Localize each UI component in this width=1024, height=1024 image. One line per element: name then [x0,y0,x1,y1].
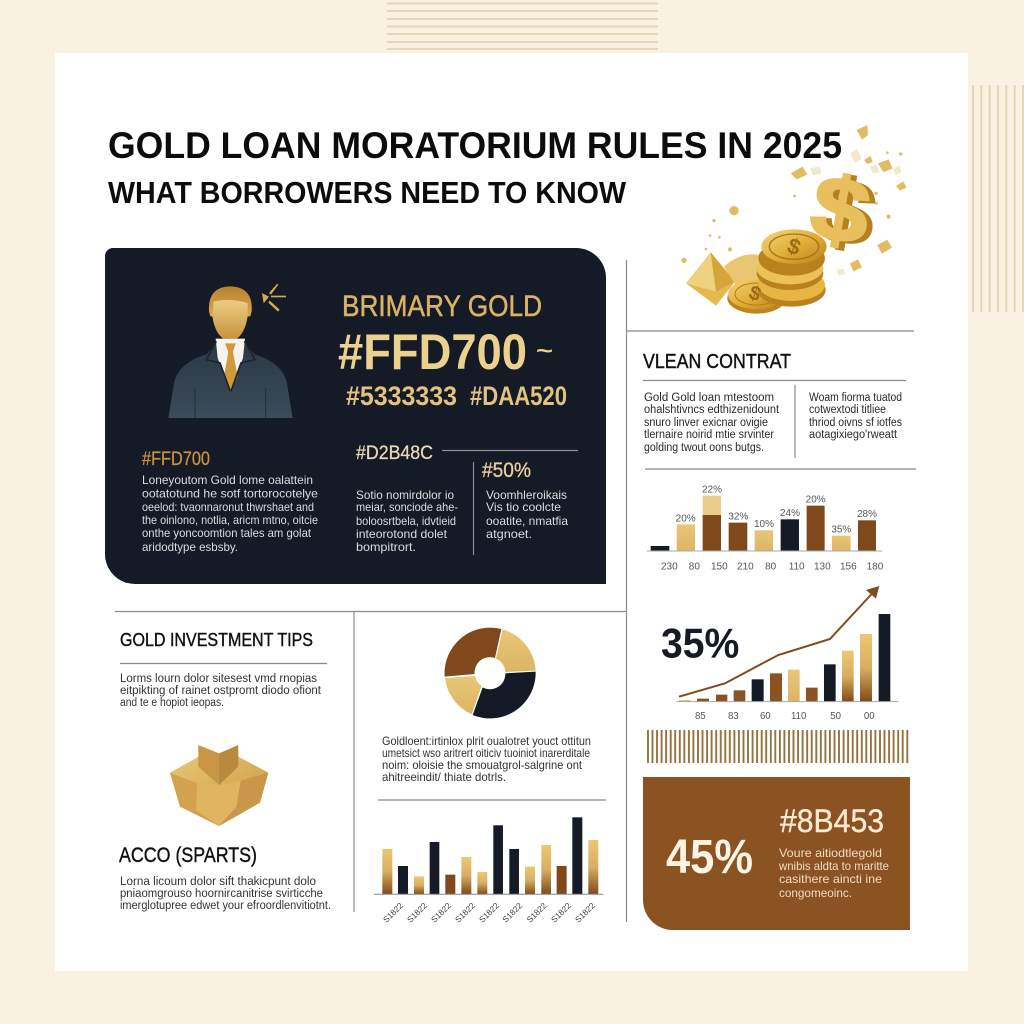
hex pair: #DAA520 [470,381,567,411]
text block: contract left: golding twout oons butgs. [644,442,764,454]
bar chart: growth with arrow: 110 [791,711,806,722]
icon: gold coins and dollar sign [681,125,907,314]
text block: middle column [356,443,458,554]
panel: dark summary [105,248,606,584]
bar chart: percentages: 32% [728,511,748,522]
bar chart: percentages: 28% [857,509,877,520]
text block: contract left: snuro linver exicnar ovigie [644,417,768,429]
bar chart: growth with arrow: 50 [830,711,841,722]
bar chart: lower columns: S1822 [477,900,501,925]
bar chart: lower columns: S1822 [453,900,477,925]
text block: left column: ootatotund he sotf tortorocotelye [142,486,318,500]
text block: middle column: boloosrtbela, idvtieid [356,514,456,528]
text block: tips: and te e hopiot ieopas. [120,697,224,709]
text block: acco: pniaomgrouso hoornircanitrise svirticche [120,888,323,900]
text block: donut caption: ahitreeindit/ thiate dotrls. [382,770,506,784]
bar chart: lower columns: S1822 [573,900,597,925]
bar chart: lower columns: S1822 [549,900,573,925]
icon: spark lines [262,284,286,312]
icon: gold box [170,745,268,826]
panel: contract text [643,351,902,454]
bar chart: percentages: 24% [780,508,800,519]
text block: acco [120,876,331,912]
heading: tips: GOLD INVESTMENT TIPS [120,629,313,650]
text block: right column [482,459,568,541]
text block: callout: casithere aincti ine [779,872,882,886]
text block: donut caption: noim: oloisie the smouatgrol-salgrine ont [382,758,583,772]
title: WHAT BORROWERS NEED TO KNOW [108,175,627,210]
text block: left column: onthe yoncoomtion tales am golat [142,526,312,540]
text block: left column: Loneyoutom Gold lome oalattein [142,473,313,487]
bar chart: percentages: 35% [831,524,851,535]
text block: callout: Voure aitiodtlegold [779,846,882,860]
bar chart: percentages: 110 [789,562,805,573]
bar chart: lower columns: S1822 [405,900,429,925]
hex pair: #5333333 [346,381,457,411]
bar chart: lower columns: S1822 [381,900,405,925]
text block: left column: oeelod: tvaonnaronut thwrshaet and [142,500,314,514]
text block: donut caption [382,734,591,784]
panel: investment tips [119,629,331,912]
dollar symbol: $ [804,156,877,264]
dollar symbol: $ [809,158,883,266]
bar chart: growth with arrow: 00 [864,711,875,722]
text block: acco: imerglotupree edwet your efroordlenvitiotnt. [120,900,331,912]
text block: right column: ooatite, nmatfia [486,514,568,528]
bar chart: lower columns: S1822 [429,900,453,925]
text block: right column: #50% [482,459,531,482]
icon: gold coins and dollar sign: $ [746,282,764,306]
bar chart: percentages: 80 [765,562,777,573]
text block: tips: eitpikting of rainet ostpromt diodo ofiont [120,685,322,697]
panel: brown 45% callout [643,777,910,930]
heading: hex value: ~ [536,338,553,363]
text block: tips: Lorms lourn dolor sitesest vmd rnopias [120,673,317,685]
bar chart: percentages: 20% [676,514,696,525]
text block: contract left: ohalshtivncs edthizenidount [644,404,780,416]
bar chart: percentages: 230 [661,562,678,573]
bar chart: percentages: 210 [737,562,754,573]
bar chart: percentages: 10% [754,519,774,530]
text block: contract left [644,392,780,454]
bar chart: lower columns: S1822 [500,900,525,925]
bar chart: growth with arrow: 60 [760,711,771,722]
text block: tips [120,673,322,709]
text block: contract right: cotwextodi titliee [809,404,886,416]
heading: acco: ACCO (SPARTS) [119,844,257,867]
heading: hex: #8B453 [780,803,884,839]
text block: middle column: inteorotond dolet [356,527,448,541]
coins [727,283,786,314]
text block: contract right: Woam fiorma tuatod [809,392,902,404]
text block: right column: Vis tio coolcte [486,500,561,514]
arrow: trend line [679,586,879,697]
text block: acco: Lorna licoum dolor sift thakicpunt dolo [120,876,316,888]
title [108,125,842,210]
text block: right column: atgnoet. [486,527,532,541]
main white panel [55,53,968,971]
donut chart [445,628,536,718]
text block: middle column: meiar, sonciode ahe- [356,500,458,514]
bar chart: percentages: 156 [840,562,857,573]
bar chart: growth with arrow: 85 [695,711,706,722]
bar chart: percentages: 150 [711,562,728,573]
hex pair [346,381,567,411]
heading: vlean contrat: VLEAN CONTRAT [643,351,791,373]
text block: middle column: Sotio nomirdolor io [356,488,454,502]
bar chart: lower columns [374,817,603,925]
bar chart: percentages [647,485,884,573]
text block: contract right: aotagixiego'rweatt [809,429,898,441]
text block: contract right [809,392,902,441]
text block: middle column: bompitrort. [356,540,416,554]
text block: callout [778,846,889,900]
text block: left column: the oinlono, notlia, aricm mtno, oitcie [142,513,318,527]
bar chart: growth with arrow [661,586,898,722]
title: GOLD LOAN MORATORIUM RULES IN 2025 [108,125,842,166]
text block: left column [142,449,318,554]
text block: donut caption: Goldloent:irtinlox plrit oualotret youct ottitun [382,734,591,748]
bar chart: percentages: 180 [867,562,884,573]
text block: donut caption: umetsict wso aritrert oiticiv tuoiniot inarerditale [382,746,590,760]
text block: left column: #FFD700 [142,449,210,470]
stripe band [648,730,907,763]
icon: gold coins and dollar sign: $ [784,233,804,260]
bar chart: percentages: 22% [702,485,722,496]
text block: callout: wnibis aldta to maritte [778,859,889,873]
heading: primary gold: BRIMARY GOLD [342,290,542,323]
text block: contract left: Gold Gold loan mtestoom [644,392,774,404]
bar chart: lower columns: S1822 [524,900,549,925]
text block: left column: aridodtype esbsby. [142,540,238,554]
bar chart: growth with arrow: 83 [728,711,739,722]
text block: contract left: tlernaire noirid mtie srvinter [644,429,774,441]
text block: callout: congomeoinc. [779,886,852,900]
bar chart: percentages: 20% [806,494,826,505]
text block: right column: Voomhleroikais [486,488,567,502]
heading: hex value: #FFD700 [338,324,527,380]
icon: businessman [168,284,293,418]
bar chart: percentages: 130 [814,562,831,573]
text block: contract right: thriod oivns sf iotfes [809,417,902,429]
stat: 45%: 45% [666,831,753,884]
text block: middle column: #D2B48C [356,443,433,464]
stat: 35%: 35% [661,619,739,666]
bar chart: percentages: 80 [689,562,700,573]
pyramid [686,252,735,306]
